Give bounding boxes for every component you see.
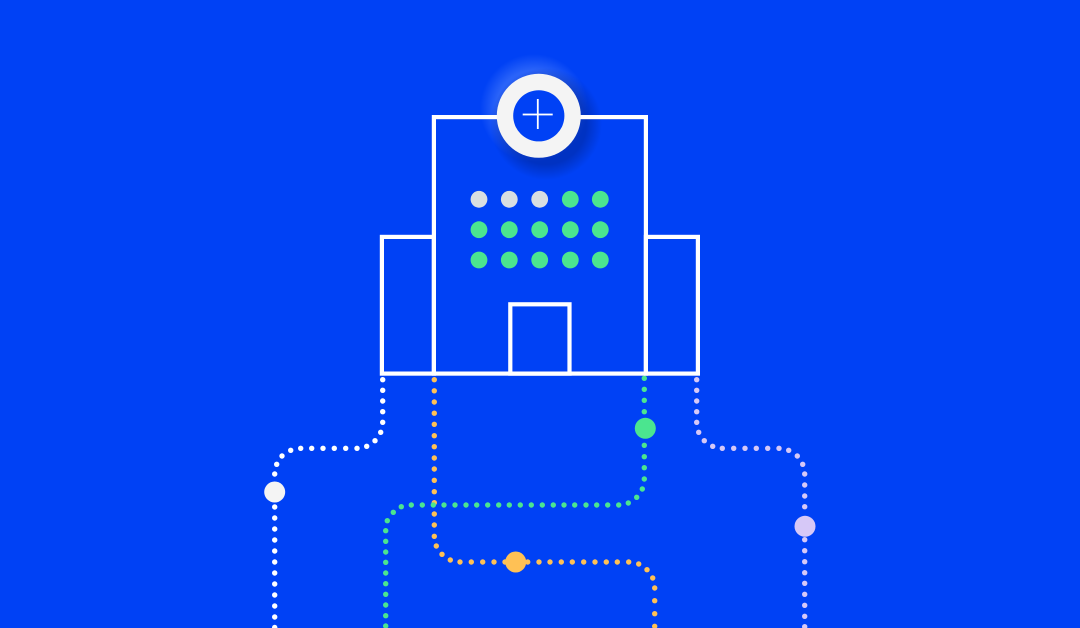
medical badge with plus sign	[497, 74, 581, 158]
medical badge glow and shadow	[480, 54, 602, 180]
icon: plus	[523, 99, 553, 129]
node: white route marker	[264, 482, 285, 502]
route: lavender dotted line	[694, 377, 807, 628]
windows grid	[471, 191, 609, 268]
door	[510, 304, 570, 374]
main block	[434, 117, 646, 374]
route: orange dotted line	[432, 377, 657, 628]
left wing	[382, 237, 434, 374]
node: green route marker	[635, 418, 656, 439]
route: white dotted line	[272, 377, 385, 628]
route: green dotted line	[383, 376, 647, 628]
node: orange route marker	[505, 552, 526, 572]
node: lavender route marker	[794, 516, 816, 537]
building outline	[382, 117, 698, 374]
right wing	[646, 237, 698, 374]
